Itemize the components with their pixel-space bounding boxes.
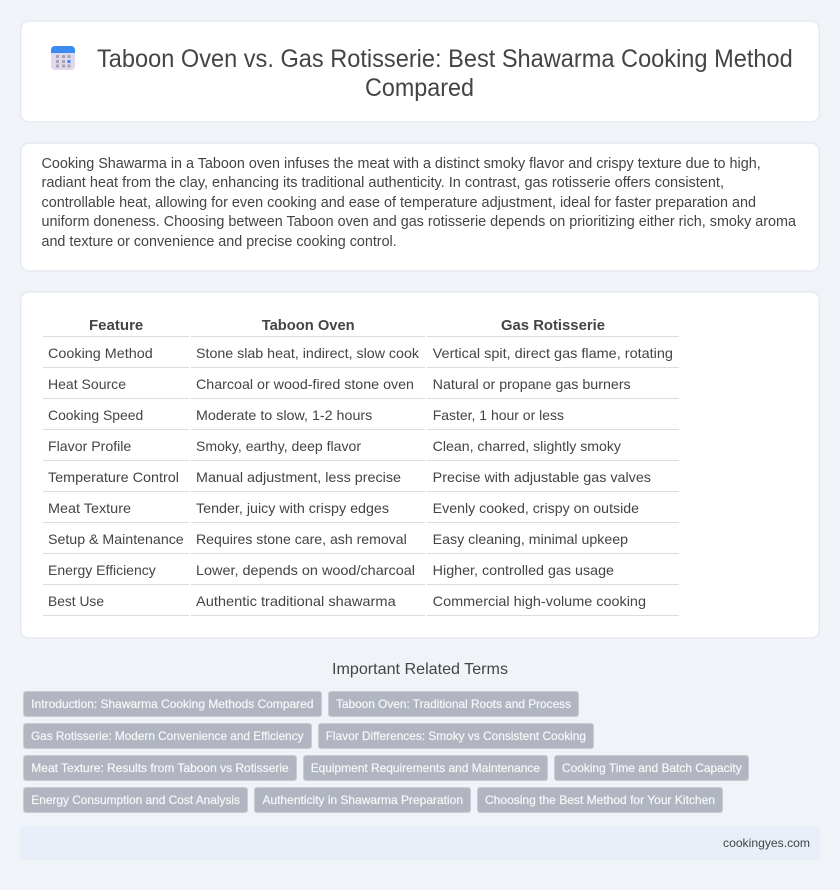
table row: cooking method: Cooking Method [48, 345, 153, 361]
title: Compared [365, 74, 474, 102]
table row: energy efficiency: Energy Efficiency [48, 562, 156, 578]
tag: gas rotisserie: Gas Rotisserie: Modern Convenience and Efficiency [31, 729, 304, 743]
table row: flavor profile: Flavor Profile [48, 438, 132, 454]
table row: meat texture: Evenly cooked, crispy on outside [433, 500, 639, 516]
table row: setup and maintenance: Requires stone care, ash removal [196, 531, 407, 547]
tag: energy consumption: Energy Consumption and Cost Analysis [31, 793, 240, 807]
tag: cooking time [554, 756, 748, 780]
icon: calendar [51, 46, 75, 70]
tag: flavor differences: Flavor Differences: Smoky vs Consistent Cooking [326, 729, 586, 743]
tag list: related terms [24, 692, 748, 812]
table row: meat texture [48, 500, 639, 516]
footer [20, 826, 820, 860]
panel: comparison table [21, 292, 819, 638]
text block: introduction: controllable heat, allowing for even cooking and ease of temperature adjustment, ideal for faster preparation and [42, 195, 756, 211]
table row: temperature control: Manual adjustment, less precise [196, 469, 401, 485]
text block: introduction: uniform doneness. Choosing between Taboon oven and gas rotisserie depends on prioritizing either rich, smoky aroma [42, 214, 797, 230]
table row: temperature control: Precise with adjustable gas valves [433, 469, 651, 485]
tag: gas rotisserie [24, 724, 312, 748]
footer: cookingyes.com [723, 836, 810, 850]
table row: energy efficiency: Higher, controlled gas usage [433, 562, 614, 578]
table row: flavor profile: Clean, charred, slightly smoky [433, 438, 621, 454]
text block: introduction: Cooking Shawarma in a Taboon oven infuses the meat with a distinct smoky flavor and crispy texture due to high, [42, 156, 761, 172]
table row: cooking speed: Faster, 1 hour or less [433, 407, 564, 423]
tag: authenticity: Authenticity in Shawarma Preparation [262, 793, 463, 807]
table row: energy efficiency: Lower, depends on wood/charcoal [196, 562, 415, 578]
tag: introduction: Introduction: Shawarma Cooking Methods Compared [31, 697, 314, 711]
table row: flavor profile [48, 438, 621, 454]
table header: Feature [89, 317, 143, 334]
table header [89, 317, 605, 334]
table row: setup and maintenance: Setup & Maintenance [48, 531, 184, 547]
table header: Gas Rotisserie [501, 317, 605, 334]
table row: temperature control: Temperature Control [48, 469, 179, 485]
panel: introduction text [21, 143, 819, 271]
table row: best use: Best Use [48, 593, 104, 609]
table row: best use [48, 593, 646, 609]
table row: cooking speed: Moderate to slow, 1-2 hours [196, 407, 372, 423]
table row: temperature control [48, 469, 651, 485]
tag: choosing the best method: Choosing the Best Method for Your Kitchen [485, 793, 715, 807]
table header: Taboon Oven [262, 317, 355, 334]
table row: heat source: Heat Source [48, 376, 126, 392]
table row: setup and maintenance: Easy cleaning, minimal upkeep [433, 531, 628, 547]
table row: cooking speed [48, 407, 564, 423]
tag: flavor differences [318, 724, 594, 748]
table row: setup and maintenance [48, 531, 628, 547]
title: Taboon Oven vs. Gas Rotisserie: Best Shawarma Cooking Method [97, 45, 793, 73]
tag: taboon oven [328, 692, 578, 716]
text block: introduction: and texture or convenience and precise cooking control. [42, 234, 397, 250]
tag: meat texture [24, 756, 296, 780]
table row: energy efficiency [48, 562, 614, 578]
table row: meat texture: Meat Texture [48, 500, 131, 516]
table row: heat source [48, 376, 631, 392]
table row: cooking method: Vertical spit, direct gas flame, rotating [433, 345, 673, 361]
tag: authenticity [254, 788, 470, 812]
table row: cooking method: Stone slab heat, indirect, slow cook [196, 345, 420, 361]
tag: choosing the best method [478, 788, 722, 812]
tag: equipment: Equipment Requirements and Maintenance [311, 761, 540, 775]
table row: meat texture: Tender, juicy with crispy edges [196, 500, 389, 516]
panel: title card [21, 21, 819, 122]
tag: cooking time: Cooking Time and Batch Capacity [562, 761, 742, 775]
heading: important related terms: Important Related Terms [332, 661, 508, 678]
table row: best use: Authentic traditional shawarma [196, 593, 396, 609]
table row: heat source: Charcoal or wood-fired stone oven [196, 376, 414, 392]
tag: energy consumption [24, 788, 248, 812]
tag: introduction [24, 692, 322, 716]
table row: cooking method [48, 345, 673, 361]
tag: equipment [304, 756, 548, 780]
tag: taboon oven: Taboon Oven: Traditional Roots and Process [336, 697, 571, 711]
table row: heat source: Natural or propane gas burners [433, 376, 631, 392]
table row: flavor profile: Smoky, earthy, deep flavor [196, 438, 361, 454]
table row: best use: Commercial high-volume cooking [433, 593, 646, 609]
text block: introduction [42, 156, 797, 250]
title [97, 45, 793, 102]
table row: cooking speed: Cooking Speed [48, 407, 143, 423]
tag: meat texture: Meat Texture: Results from Taboon vs Rotisserie [31, 761, 289, 775]
text block: introduction: radiant heat from the clay, enhancing its traditional authenticity. In contrast, gas rotisserie offers consistent, [42, 175, 724, 191]
